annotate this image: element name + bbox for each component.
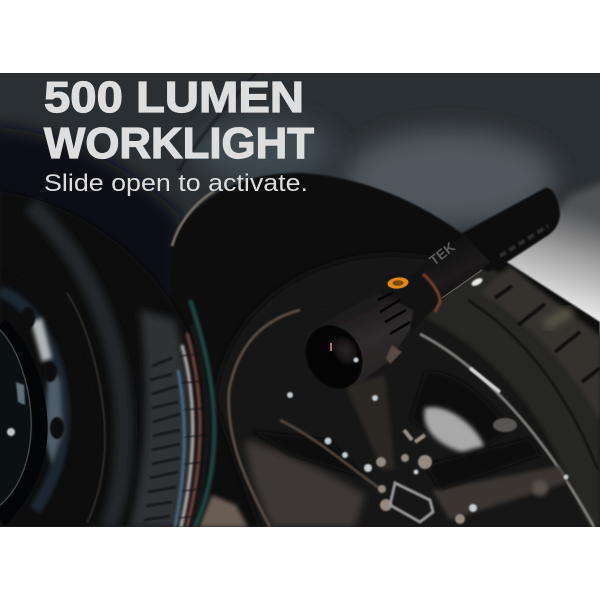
flashlight <box>296 188 560 397</box>
barrel body <box>414 234 490 300</box>
stripe ticks <box>179 354 207 518</box>
title <box>44 73 314 168</box>
bright rim patch <box>31 318 52 362</box>
dark lower-left shadow <box>0 120 185 300</box>
grip texture <box>500 226 548 256</box>
lens glass <box>322 330 364 374</box>
rim lip <box>229 310 300 527</box>
inner wheel <box>0 330 31 505</box>
handle grip <box>462 188 560 268</box>
white stripe <box>181 345 193 527</box>
tire inner groove <box>468 300 598 470</box>
inner black ring <box>0 325 40 520</box>
photo panel: car wheels <box>0 73 600 527</box>
spoke lower left <box>245 440 365 527</box>
wheel arch <box>160 173 600 527</box>
tread band <box>425 262 600 527</box>
red ring <box>423 274 440 312</box>
inner glint <box>7 428 15 436</box>
tread block <box>130 310 191 527</box>
left tire <box>0 191 214 527</box>
car body background <box>0 73 600 527</box>
bright rim lip right <box>420 334 594 527</box>
lens <box>296 317 372 397</box>
title line two: WORKLIGHT <box>44 119 314 168</box>
subtitle: Slide open to activate. <box>44 170 308 197</box>
rim patch lower <box>45 365 63 465</box>
tread highlights <box>545 310 572 326</box>
lens glint <box>330 343 332 351</box>
brake cavity <box>410 372 510 455</box>
lens reflection <box>354 358 358 362</box>
body panel streak <box>178 73 256 172</box>
green stripe <box>190 300 214 527</box>
thin diagonal spoke <box>280 420 382 490</box>
badge disc <box>386 276 410 290</box>
tread dots <box>144 358 180 520</box>
tread shoulder <box>480 266 600 420</box>
inner wheel arc <box>0 330 31 505</box>
chrome hub emblem <box>390 483 433 522</box>
red stripe <box>187 333 200 527</box>
rim glint <box>470 368 500 392</box>
body highlight left <box>195 118 335 182</box>
rim edge <box>67 293 105 523</box>
spoke top <box>345 375 395 470</box>
dark band between stripes <box>192 325 207 527</box>
brake parts <box>493 418 517 432</box>
rim holes <box>21 307 64 439</box>
barrel reflection <box>442 270 482 298</box>
zoom head <box>307 292 413 385</box>
arch highlight <box>172 191 214 246</box>
tread grooves <box>495 286 600 382</box>
head knurling <box>378 292 410 334</box>
spoke lower right <box>432 466 568 520</box>
badge symbol <box>392 280 404 286</box>
collar band <box>455 228 498 272</box>
shadow spoke <box>425 438 540 490</box>
shadow band <box>254 430 358 476</box>
sidewall sheen <box>30 205 124 527</box>
brake disc <box>424 407 484 452</box>
right wheel rim <box>229 309 594 527</box>
rim barrel <box>0 292 64 510</box>
water droplets <box>287 392 568 512</box>
title line one: 500 LUMEN <box>44 73 304 122</box>
inner sheen <box>16 382 25 405</box>
rim interior <box>580 512 589 527</box>
LED window <box>470 277 484 287</box>
tire sidewall <box>0 191 213 527</box>
knurl glints <box>386 345 402 364</box>
body highlight blue-gray <box>345 130 555 226</box>
rim well <box>0 270 104 527</box>
infographic canvas <box>0 73 600 527</box>
right tire <box>215 255 600 527</box>
bright wall at right <box>506 180 600 340</box>
hub bolts <box>376 430 465 524</box>
brand label: TEK <box>426 239 458 268</box>
tire body <box>218 258 569 524</box>
orange power badge <box>386 276 410 290</box>
blue stripe <box>175 370 184 527</box>
beige floor patch <box>198 495 248 527</box>
lower right light <box>532 480 548 496</box>
neck <box>392 270 442 332</box>
